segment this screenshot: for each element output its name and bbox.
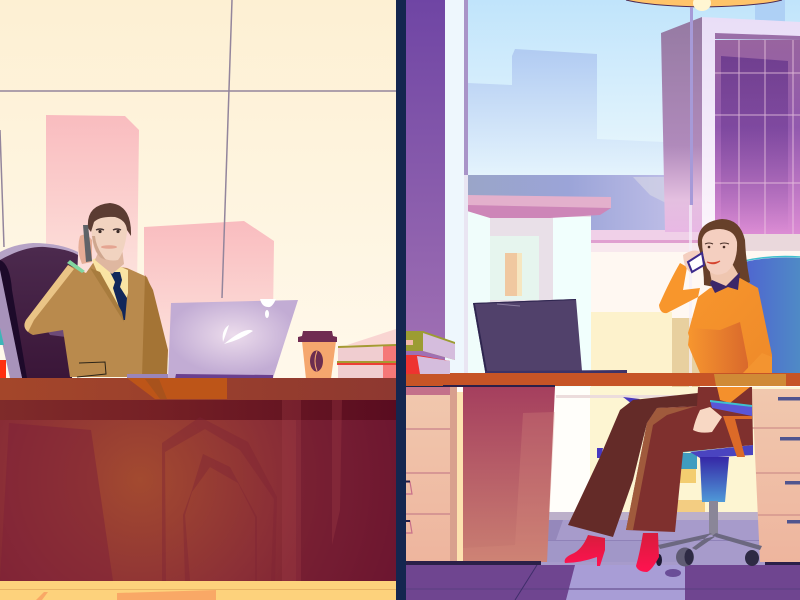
hair <box>88 203 131 236</box>
arch carving <box>162 417 277 581</box>
coffee cup <box>298 331 337 379</box>
face <box>702 229 737 275</box>
woman's chair <box>597 256 800 577</box>
eyes <box>96 229 121 230</box>
base legs <box>658 533 762 550</box>
torso <box>688 278 772 373</box>
front leg <box>626 387 753 532</box>
seat back pieces <box>623 397 640 404</box>
window frame lines <box>0 0 396 298</box>
shadow band <box>0 400 396 420</box>
office chair <box>0 243 78 380</box>
panel: right office scene <box>406 0 800 600</box>
small distant tower <box>755 0 785 22</box>
shirt collar <box>92 257 128 316</box>
left shoe <box>565 535 605 566</box>
right drawer cabinet <box>752 389 800 565</box>
lower torso shading <box>688 322 748 373</box>
phone <box>83 225 92 262</box>
back leg <box>568 393 698 537</box>
floor <box>406 512 800 600</box>
panel: left office scene <box>0 0 396 600</box>
sky <box>406 0 800 180</box>
large purple building <box>661 17 800 268</box>
woman on phone <box>406 219 800 572</box>
seat cylinder <box>700 457 729 502</box>
post <box>709 501 718 535</box>
neck <box>708 260 738 287</box>
right sleeve <box>743 353 772 373</box>
lower window background <box>468 232 800 395</box>
divider <box>396 0 406 600</box>
lamp rod <box>690 7 693 205</box>
wheels <box>676 548 694 566</box>
face details <box>705 243 729 244</box>
laptop on desk <box>473 299 627 373</box>
background building low <box>144 221 274 360</box>
man on phone <box>24 203 168 377</box>
necktie <box>110 272 127 320</box>
desk front <box>0 420 396 581</box>
mouth <box>101 245 117 249</box>
shadow <box>665 569 681 577</box>
laptop <box>127 299 298 379</box>
pocket <box>77 362 106 377</box>
hand and neck <box>78 235 92 264</box>
desk <box>0 378 396 600</box>
desk top <box>0 378 396 400</box>
background building tall <box>46 115 139 290</box>
purple column <box>406 0 445 374</box>
stack of books <box>337 344 396 380</box>
hanging lamp <box>626 0 782 11</box>
desk top <box>406 373 800 386</box>
books on desk <box>406 331 455 374</box>
green cuff <box>67 260 85 273</box>
under-desk window <box>456 387 800 513</box>
right shoe <box>636 533 659 572</box>
head <box>92 215 128 260</box>
mid building band <box>468 175 668 235</box>
hair <box>698 219 750 290</box>
lapel shading <box>90 268 124 322</box>
floor strip <box>0 581 396 600</box>
vertical glass bar <box>689 205 692 520</box>
pink wedge behind books <box>347 329 396 346</box>
pink bands <box>590 230 700 241</box>
seat <box>690 445 753 458</box>
desk leg panel left <box>406 387 555 565</box>
mid building with window <box>466 195 611 390</box>
jacket <box>25 263 167 377</box>
raised arm <box>659 263 700 313</box>
chair back <box>735 258 800 380</box>
hand and phone <box>683 251 700 272</box>
collar <box>710 272 740 293</box>
sleeve and resting hand <box>693 387 752 457</box>
distant skyline <box>468 49 664 180</box>
